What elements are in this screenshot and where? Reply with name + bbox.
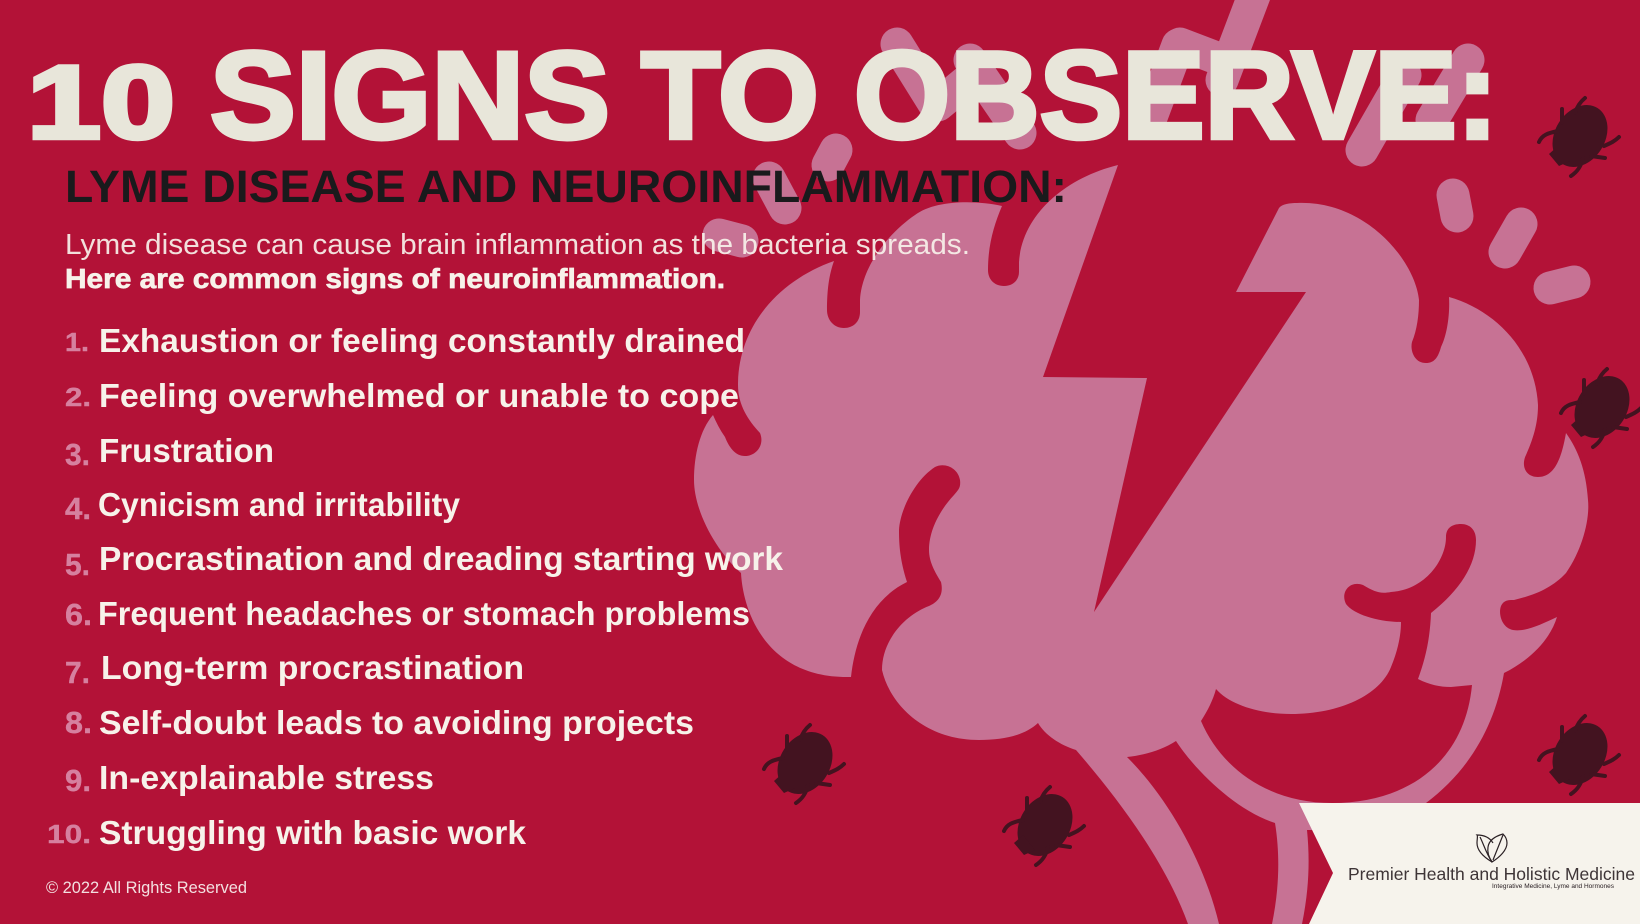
brand name: Premier Health and Holistic Medicine: [1348, 864, 1635, 884]
sign 1: 1.: [65, 327, 89, 357]
sign 10: Struggling with basic work: [99, 814, 527, 851]
title: OBSERVE:: [854, 27, 1498, 165]
sign 10: 10.: [47, 819, 91, 849]
brain silhouette and stem: [694, 165, 1588, 924]
radiating pain lines: [719, 0, 1574, 288]
sign 6: Frequent headaches or stomach problems: [98, 595, 750, 632]
intro text: [65, 229, 970, 294]
icon: tick lower centre: [1004, 784, 1084, 866]
sign 2: 2.: [65, 382, 91, 412]
sign 6: 6.: [65, 597, 92, 632]
icon: leaf heart logo: [1477, 834, 1507, 862]
icon: tick right: [1561, 366, 1640, 448]
title: [27, 27, 1498, 165]
intro text: Lyme disease can cause brain inflammation as the bacteria spreads.: [65, 229, 970, 261]
sign 5: 5.: [65, 547, 90, 582]
sign 3: Frustration: [99, 432, 274, 469]
ticks: [764, 95, 1640, 866]
sign 2: Feeling overwhelmed or unable to cope: [99, 377, 739, 414]
intro text: Here are common signs of neuroinflammation.: [65, 263, 725, 294]
title: SIGNS: [210, 27, 610, 165]
copyright: © 2022 All Rights Reserved: [46, 879, 247, 897]
sign 7: Long-term procrastination: [101, 649, 524, 686]
sign 5: Procrastination and dreading starting work: [99, 540, 784, 577]
tagline: Integrative Medicine, Lyme and Hormones: [1492, 883, 1615, 890]
sign 4: Cynicism and irritability: [98, 486, 461, 523]
sign 8: 8.: [65, 705, 92, 740]
sign 9: In-explainable stress: [99, 759, 434, 796]
logo panel: [1299, 803, 1640, 924]
lower sulcus and arc: [1201, 524, 1476, 803]
sign 7: 7.: [65, 655, 90, 690]
brain with lightning bolt: [694, 165, 1588, 924]
icon: tick lower right: [1539, 713, 1619, 795]
sign 1: Exhaustion or feeling constantly drained: [99, 322, 745, 359]
icon: tick lower left: [764, 722, 844, 804]
title: TO: [641, 27, 819, 165]
sign 9: 9.: [65, 763, 91, 798]
subheading: LYME DISEASE AND NEUROINFLAMMATION:: [65, 161, 1067, 212]
title: 10: [27, 45, 175, 161]
icon: tick top right: [1539, 95, 1619, 177]
sign 4: 4.: [65, 491, 91, 526]
numbered list of signs: [47, 322, 784, 851]
sign 3: 3.: [65, 437, 90, 472]
sign 8: Self-doubt leads to avoiding projects: [99, 704, 694, 741]
